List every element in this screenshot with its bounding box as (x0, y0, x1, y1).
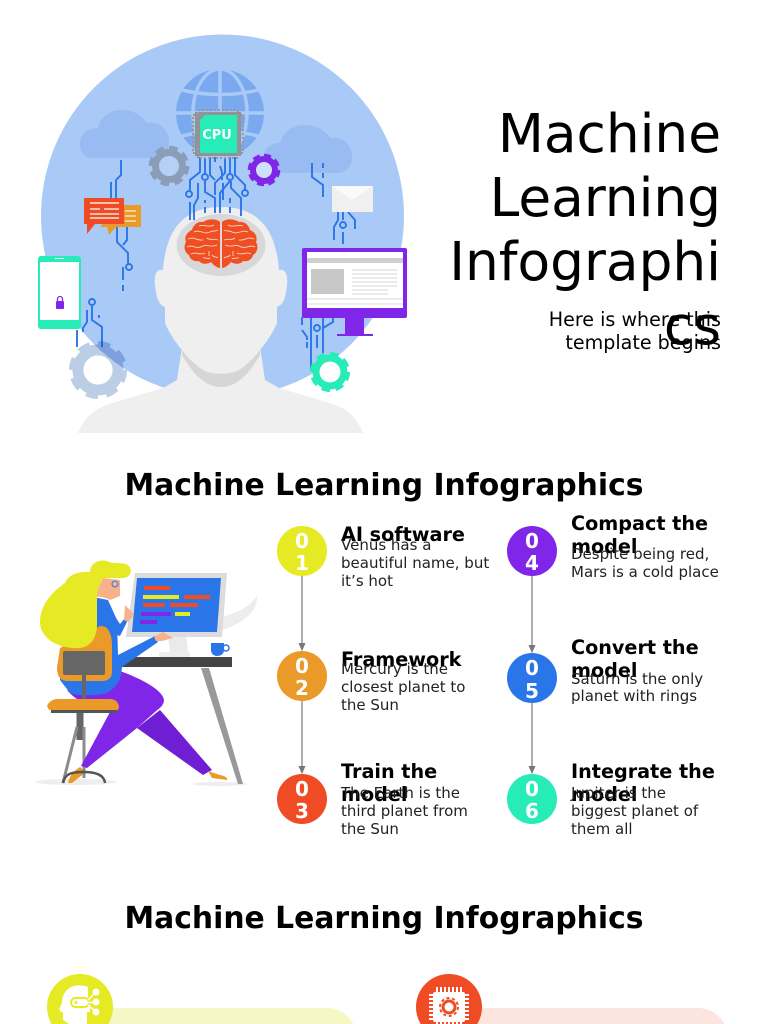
icon: green gear (312, 354, 348, 390)
step 06: model (571, 783, 638, 806)
chair legs (63, 712, 105, 783)
step 02: 2 (295, 676, 309, 700)
icon: monitor (302, 248, 407, 336)
step 05: 5 (525, 679, 539, 703)
title (449, 103, 721, 357)
icon: envelope (332, 186, 373, 212)
connector arrow 1 to 2 (301, 576, 303, 650)
hair (40, 561, 131, 648)
step 03: model (341, 783, 408, 806)
icon: CPU chip: CPU (202, 128, 232, 143)
timeline column two (507, 512, 719, 838)
step 02: the Sun (341, 696, 399, 714)
step 04 (507, 512, 719, 581)
card: left, yellow (47, 974, 354, 1024)
icon: head with network (59, 985, 100, 1024)
title: Machine (498, 103, 721, 165)
central circuit lines (186, 157, 248, 220)
step 03: Train the (341, 760, 437, 783)
step 01: beautiful name, but (341, 554, 489, 572)
step 01: AI software (341, 523, 465, 546)
brain cavity (176, 214, 266, 276)
swoosh (222, 595, 257, 630)
icon: CPU chip (193, 110, 243, 158)
step 06 (507, 760, 715, 838)
shoes (68, 767, 227, 783)
step 06: biggest planet of (571, 802, 699, 820)
step 01 (277, 523, 489, 590)
step 05: Saturn is the only (571, 670, 703, 688)
desk monitor (126, 573, 227, 657)
card background (418, 1008, 724, 1024)
far leg (137, 710, 212, 775)
step 03 (277, 760, 468, 838)
subtitle: Here is where this (549, 308, 721, 331)
icon: chip with gear (429, 987, 469, 1024)
icon: large gear (72, 344, 124, 396)
illustration: AI head with connected devices (38, 34, 407, 433)
step 04: Despite being red, (571, 545, 709, 563)
icon: right cloud (263, 125, 352, 173)
step 01: 1 (295, 551, 309, 575)
step 05: model (571, 659, 638, 682)
step 06: Integrate the (571, 760, 715, 783)
arm and torso (60, 597, 158, 695)
chair (47, 626, 119, 713)
title: cs (664, 295, 721, 357)
title: Infographi (449, 231, 721, 293)
glasses (112, 581, 118, 587)
step 02 (277, 648, 465, 714)
step 06: them all (571, 820, 633, 838)
step 04: Mars is a cold place (571, 563, 719, 581)
timeline column one (277, 523, 489, 838)
human head (155, 207, 287, 374)
desk (122, 657, 243, 784)
step 04: Compact the (571, 512, 708, 535)
icon: phone with lock (38, 256, 81, 329)
step 01: Venus has a (341, 536, 431, 554)
icon: purple gear (250, 156, 278, 184)
step 03: The Earth is the (340, 784, 460, 802)
hands (124, 605, 173, 641)
step 03: 3 (295, 799, 309, 823)
step 06: 6 (525, 799, 539, 823)
pants (67, 671, 164, 768)
icon: gray gear (151, 148, 187, 184)
step 04: 0 (525, 529, 539, 553)
step 05: Convert the (571, 636, 699, 659)
subtitle: template begins (565, 331, 721, 354)
card background (48, 1008, 354, 1024)
step 02: closest planet to (341, 678, 465, 696)
connector arrow 4 to 5 (531, 576, 533, 652)
step 02: Framework (341, 648, 463, 671)
connector arrow 2 to 3 (301, 701, 303, 773)
heading: section two: Machine Learning Infographics (124, 901, 644, 936)
step 03: 0 (295, 777, 309, 801)
connector arrow 5 to 6 (531, 703, 533, 773)
step 02: Mercury is the (341, 660, 448, 678)
step 05 (507, 636, 703, 705)
blue background circle (41, 34, 404, 398)
step 05: planet with rings (571, 687, 697, 705)
illustration: woman working at desk (35, 561, 257, 786)
card: right, red (416, 974, 724, 1024)
icon: left cloud (80, 110, 169, 158)
human body (78, 340, 363, 433)
floor shadows (35, 779, 247, 786)
step 01: it’s hot (341, 572, 393, 590)
step 06: Jupiter is the (570, 784, 666, 802)
icon circle (47, 974, 113, 1024)
step 01: 0 (295, 529, 309, 553)
step 05: 0 (525, 656, 539, 680)
step 04: 4 (525, 551, 539, 575)
step 04: model (571, 535, 638, 558)
title: Learning (490, 167, 721, 229)
coffee cup (211, 643, 229, 656)
icon: globe (176, 69, 264, 157)
subtitle (549, 308, 721, 354)
step 02: 0 (295, 654, 309, 678)
step 03: third planet from (341, 802, 468, 820)
neck shadow (182, 345, 260, 387)
side circuit lines (77, 160, 355, 370)
icon: chat bubbles (84, 198, 141, 235)
icon: brain (185, 219, 257, 268)
face (94, 578, 120, 600)
step 03: the Sun (341, 820, 399, 838)
step 06: 0 (525, 777, 539, 801)
heading: section one: Machine Learning Infographics (124, 468, 644, 503)
icon circle (416, 974, 482, 1024)
